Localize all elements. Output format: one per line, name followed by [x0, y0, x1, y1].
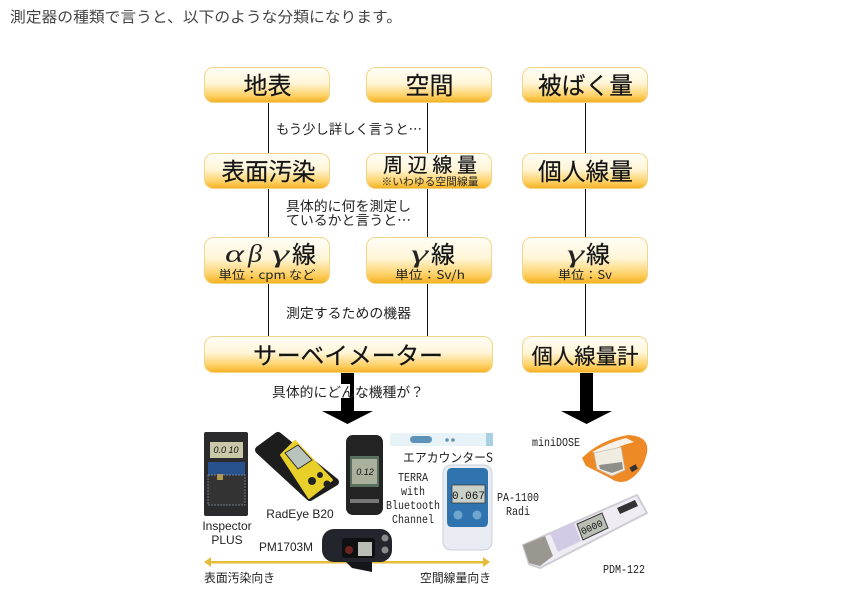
device: TERRA [346, 435, 383, 515]
label: PA-1100 Radi: PA-1100 [497, 491, 539, 505]
label: PM1703M: PM1703M [259, 540, 313, 554]
device: miniDOSE [582, 435, 647, 482]
box: αβγ線: β [247, 241, 263, 268]
label: Inspector PLUS: Inspector [202, 519, 252, 533]
box: γ線 Sv [522, 235, 648, 284]
label: TERRA [386, 471, 440, 527]
device: PDM-122: 0000 [579, 518, 605, 537]
arrow: 表面汚染向き to 空間線量向き [204, 557, 490, 567]
device: Inspector PLUS [204, 432, 248, 516]
box: αβγ線: 線 [292, 235, 316, 270]
caption: 測定するための機器: 測定するための機器 [286, 302, 412, 322]
device: TERRA: 0.12 [356, 467, 374, 477]
caption: もう少し詳しく言うと: もう少し詳しく言うと… [276, 118, 422, 138]
box: 周辺線量: 周辺線量 [383, 149, 477, 178]
caption: 具体的に何を測定しているかと言うと: 具体的に何を測定し [286, 195, 411, 215]
label: RadEye B20: RadEye B20 [266, 507, 334, 521]
box: γ線 Sv: 単位：Sv [558, 266, 613, 283]
caption: 具体的に何を測定しているかと言うと: ているかと言うと… [286, 209, 411, 229]
device: PA-1100 Radi [443, 465, 492, 550]
label: TERRA: with [401, 485, 425, 499]
heading: 測定器の種類で言うと、以下のような分類になります。 [10, 6, 402, 27]
box: 周辺線量 [366, 149, 492, 189]
box: 空間: 空間 [406, 66, 454, 101]
label: TERRA: Channel [392, 513, 434, 527]
box: αβγ線: γ [272, 241, 291, 268]
box: 個人線量: 個人線量 [538, 152, 633, 187]
box: αβγ線 [204, 235, 330, 284]
device: RadEye B20 [259, 436, 335, 498]
device: PDM-122 [523, 495, 647, 568]
box: 地表 [204, 66, 330, 102]
label: TERRA: TERRA [398, 471, 429, 485]
arrow: personal dosimeter to devices [561, 373, 612, 424]
device: PM1703M [322, 529, 392, 572]
label: Inspector PLUS [202, 519, 252, 547]
box: 被ばく量: 被ばく量 [538, 66, 633, 101]
box: γ線 Sv/h: 線 [431, 235, 455, 270]
box: 空間 [366, 66, 492, 102]
label: 表面汚染向き: 表面汚染向き [204, 569, 275, 586]
box: 周辺線量: ※いわゆる空間線量 [382, 174, 479, 189]
label: PA-1100 Radi [497, 491, 539, 519]
box: γ線 Sv: γ [567, 241, 586, 268]
arrow: survey meter to devices [322, 373, 373, 424]
connector lines [268, 103, 586, 336]
box: γ線 Sv/h: γ [411, 241, 430, 268]
label: PA-1100 Radi: Radi [506, 505, 530, 519]
label: PDM-122: PDM-122 [603, 563, 645, 577]
box: γ線 Sv/h: 単位：Sv/h [395, 266, 465, 283]
box: 表面汚染: 表面汚染 [222, 152, 316, 187]
device: PA-1100 Radi: 0.067 [452, 491, 485, 503]
device: Inspector PLUS: 0.0 10 [213, 445, 239, 455]
box: αβγ線: α [225, 241, 245, 268]
box: 個人線量計: 個人線量計 [532, 340, 638, 371]
box: 地表: 地表 [244, 66, 292, 101]
box: サーベイメーター [204, 336, 492, 372]
label: Inspector PLUS: PLUS [211, 533, 243, 547]
box: γ線 Sv/h [366, 235, 492, 284]
label: TERRA: Bluetooth [386, 499, 440, 513]
box: サーベイメーター: サーベイメーター [253, 336, 443, 371]
device: エアカウンターS [390, 433, 493, 446]
caption: 具体的に何を測定しているかと言うと [286, 195, 411, 229]
box: αβγ線: 単位：cpm など [218, 266, 316, 283]
caption: 具体的にどんな機種が: 具体的にどんな機種が？ [272, 381, 424, 401]
label: miniDOSE: miniDOSE [532, 436, 580, 450]
label: 空間線量向き: 空間線量向き [420, 569, 491, 586]
box: γ線 Sv: 線 [586, 235, 610, 270]
label: エアカウンターS: エアカウンターS [403, 447, 493, 466]
